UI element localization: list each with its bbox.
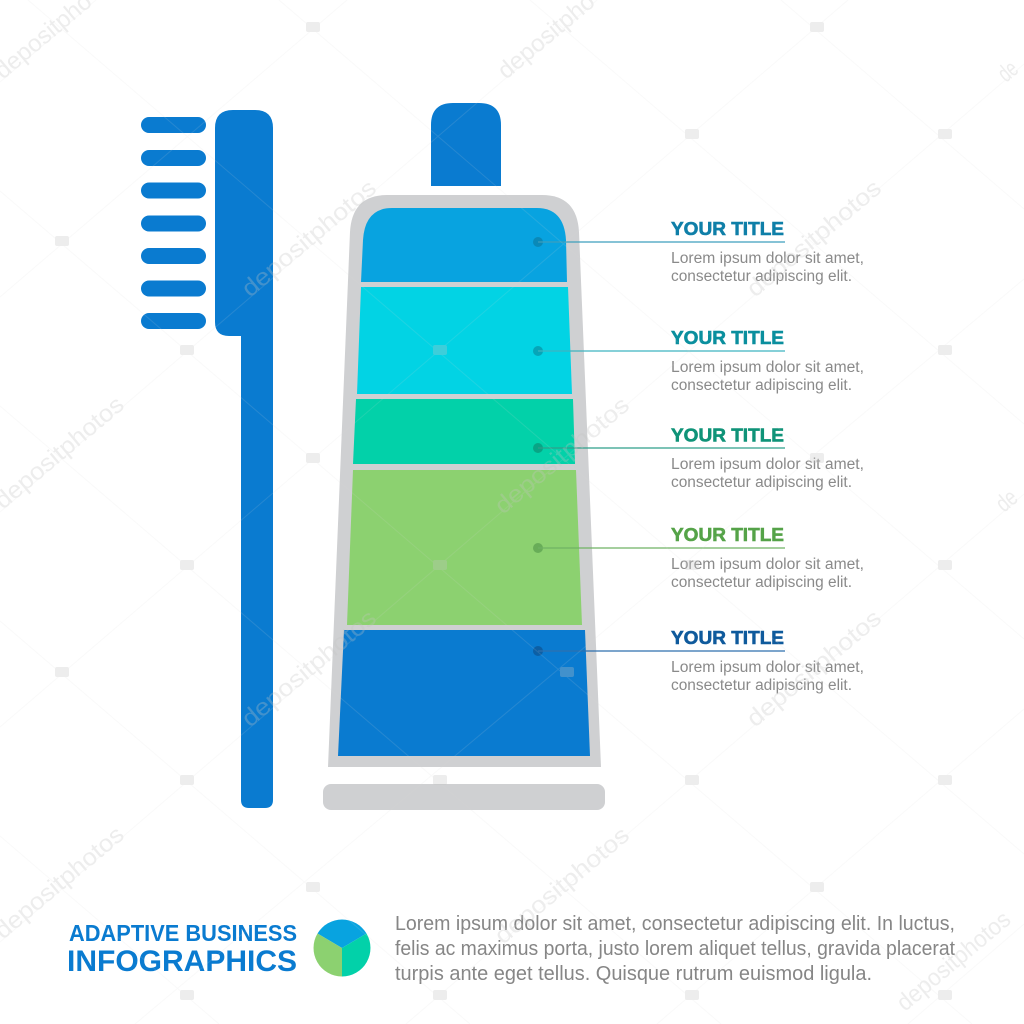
tube segment 3 xyxy=(353,399,575,464)
watermark overlay: depositphotos xyxy=(490,822,635,950)
watermark overlay: depositphotos xyxy=(892,906,1016,1017)
callout title: YOUR TITLE xyxy=(671,627,784,648)
watermark overlay: depositphotos xyxy=(237,605,382,733)
tube crimp base xyxy=(323,784,605,810)
tube segment 5 xyxy=(338,630,590,756)
callout body: consectetur adipiscing elit. xyxy=(671,474,852,491)
watermark overlay: depositphotos xyxy=(742,175,887,303)
callout body: Lorem ipsum dolor sit amet, xyxy=(671,359,864,376)
callout 2 xyxy=(533,327,864,394)
tube segment 1 xyxy=(361,208,567,282)
leader line xyxy=(538,650,785,652)
footer paragraph: Lorem ipsum dolor sit amet, consectetur adipiscing elit. In luctus, xyxy=(395,913,955,935)
icon: toothpaste tube xyxy=(323,103,605,810)
callout title: YOUR TITLE xyxy=(671,327,784,348)
callout body: consectetur adipiscing elit. xyxy=(671,377,852,394)
callout 3 xyxy=(533,424,864,491)
footer paragraph: turpis ante eget tellus. Quisque rutrum euismod ligula. xyxy=(395,963,872,985)
watermark overlay: depositphotos xyxy=(237,175,382,303)
footer heading: ADAPTIVE BUSINESS xyxy=(69,920,297,946)
watermark overlay: depositphotos xyxy=(742,605,887,733)
toothbrush bristles xyxy=(141,117,206,329)
tube segment 4 xyxy=(347,470,582,625)
footer heading: INFOGRAPHICS xyxy=(67,945,297,978)
leader line xyxy=(538,447,785,449)
watermark overlay: depositphotos xyxy=(490,392,635,520)
callout title: YOUR TITLE xyxy=(671,424,784,446)
callout 5 xyxy=(533,627,864,694)
marker dot xyxy=(533,543,543,553)
callout body: Lorem ipsum dolor sit amet, xyxy=(671,250,864,267)
tube segment 2 xyxy=(357,287,572,394)
toothbrush handle and head xyxy=(215,110,273,808)
leader line xyxy=(538,547,785,549)
callout body: consectetur adipiscing elit. xyxy=(671,677,852,694)
callout title: YOUR TITLE xyxy=(671,524,784,545)
marker dot xyxy=(533,443,543,453)
marker dot xyxy=(533,237,543,247)
marker dot xyxy=(533,646,543,656)
callout body: consectetur adipiscing elit. xyxy=(671,574,852,591)
callout body: consectetur adipiscing elit. xyxy=(671,268,852,285)
callout 4 xyxy=(533,524,864,591)
callout title: YOUR TITLE xyxy=(671,218,784,239)
icon: toothbrush xyxy=(141,110,273,808)
callout body: Lorem ipsum dolor sit amet, xyxy=(671,456,864,473)
icon: pie logo xyxy=(314,920,370,976)
footer paragraph: felis ac maximus porta, justo lorem aliquet tellus, gravida placerat xyxy=(395,938,955,960)
marker dot xyxy=(533,346,543,356)
leader line xyxy=(538,241,785,243)
callout body: Lorem ipsum dolor sit amet, xyxy=(671,659,864,676)
leader line xyxy=(538,350,785,352)
tube body outline xyxy=(328,195,601,767)
callout body: Lorem ipsum dolor sit amet, xyxy=(671,556,864,573)
callout 1 xyxy=(533,218,864,285)
tube cap xyxy=(431,103,501,186)
footer heading xyxy=(67,920,297,978)
